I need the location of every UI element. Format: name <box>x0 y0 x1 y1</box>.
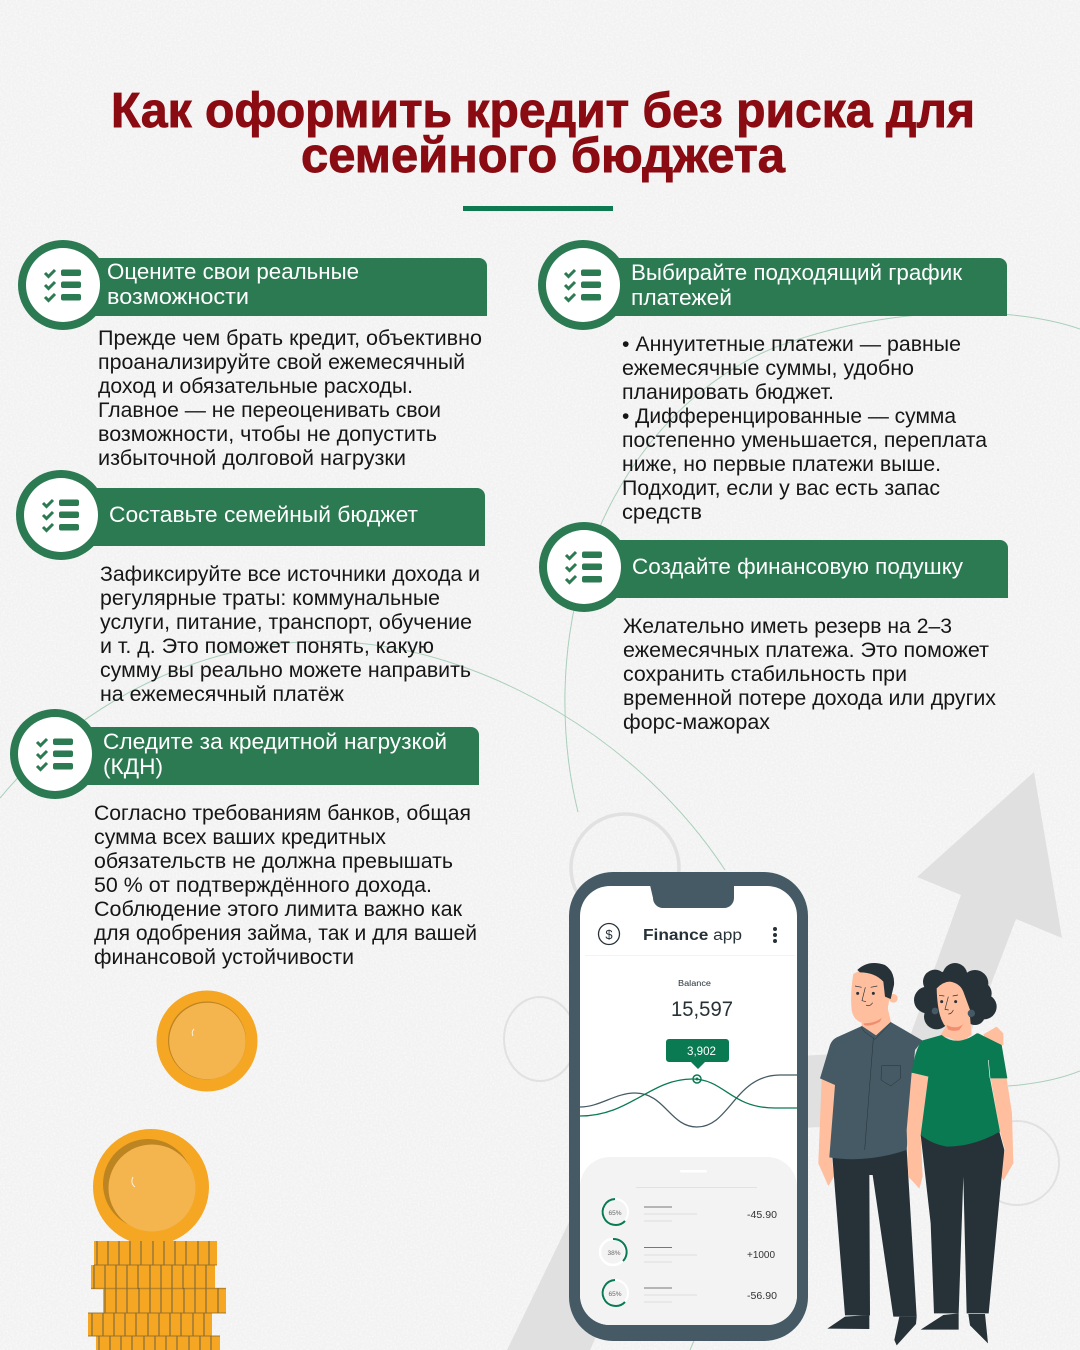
illustration: couple <box>818 963 1013 1345</box>
body text <box>623 614 996 734</box>
icon: checklist <box>10 709 100 799</box>
background circles <box>504 814 1059 1205</box>
body text: сохранить стабильность при <box>623 662 907 686</box>
body text: на ежемесячный платёж <box>100 682 345 706</box>
heading: платежей <box>631 285 732 310</box>
icon: coin stack <box>88 1129 226 1350</box>
man <box>818 963 923 1345</box>
body text: 50 % от подтверждённого дохода. <box>94 873 432 897</box>
heading: (КДН) <box>103 754 163 779</box>
body text: для одобрения займа, так и для вашей <box>94 921 477 945</box>
app header: Finance app <box>643 927 742 944</box>
heading bar <box>88 488 485 546</box>
balance: Balance <box>678 979 712 988</box>
body text: обязательств не должна превышать <box>94 849 453 873</box>
stacked coins <box>88 1241 226 1350</box>
icon: single coin <box>156 990 258 1092</box>
body text: услуги, питание, транспорт, обучение <box>100 610 472 634</box>
screen <box>580 886 797 1325</box>
body text: временной потере дохода или других <box>623 686 996 710</box>
body text: ниже, но первые платежи выше. <box>622 452 941 476</box>
title divider <box>463 206 613 211</box>
transaction row 3: 65% <box>608 1291 622 1298</box>
background thin arcs <box>0 313 1080 1350</box>
transaction row 1 <box>602 1199 777 1225</box>
icon: checklist <box>18 240 108 330</box>
icon: dollar: $ <box>605 927 613 942</box>
body text: ежемесячные суммы, удобно <box>622 356 914 380</box>
body text: форс-мажорах <box>623 710 770 734</box>
transaction row 1: -45.90 <box>747 1210 777 1221</box>
body text <box>622 332 987 524</box>
title: Как оформить кредит без риска для <box>111 84 975 138</box>
body text: Соблюдение этого лимита важно как <box>94 897 463 921</box>
heading <box>107 259 359 309</box>
icon: checklist <box>539 522 629 612</box>
title: семейного бюджета <box>301 129 786 183</box>
transaction row 2: 38% <box>607 1250 621 1257</box>
body text <box>100 562 480 706</box>
balance: 15,597 <box>671 997 733 1021</box>
body text: финансовой устойчивости <box>94 945 354 969</box>
body text: Согласно требованиям банков, общая <box>94 801 471 825</box>
body text: возможности, чтобы не допустить <box>98 422 437 446</box>
heading: Составьте семейный бюджет <box>109 502 418 527</box>
heading <box>103 729 447 779</box>
body text: сумма всех ваших кредитных <box>94 825 386 849</box>
title <box>111 84 975 183</box>
phone body <box>569 872 808 1341</box>
body text <box>98 326 482 470</box>
background growth arrow <box>507 772 1062 1350</box>
body text: сумму вы реально можете направить <box>100 658 471 682</box>
heading bar <box>611 540 1008 598</box>
icon: checklist <box>538 240 628 330</box>
transaction row 2: +1000 <box>747 1250 775 1261</box>
transaction row 1: 65% <box>608 1210 622 1217</box>
icon: dollar <box>598 924 620 944</box>
transaction row 3: -56.90 <box>747 1291 777 1302</box>
panel: assess your means <box>18 240 487 470</box>
heading: Создайте финансовую подушку <box>632 554 964 579</box>
heading bar <box>82 727 479 785</box>
body text: Желательно иметь резерв на 2–3 <box>623 614 952 638</box>
heading: Выбирайте подходящий график <box>631 260 962 285</box>
phone mockup <box>569 872 808 1341</box>
body text: • Аннуитетные платежи — равные <box>622 332 961 356</box>
body text: доход и обязательные расходы. <box>98 374 413 398</box>
large coin <box>93 1129 209 1245</box>
body text: постепенно уменьшается, переплата <box>622 428 987 452</box>
transaction row 2 <box>600 1239 775 1265</box>
body text: избыточной долговой нагрузки <box>98 446 406 470</box>
panel: financial cushion <box>539 522 1008 734</box>
balance <box>671 979 733 1021</box>
body text: Главное — не переоценивать свои <box>98 398 441 422</box>
app header <box>585 924 795 956</box>
icon: checklist <box>16 470 106 560</box>
heading <box>631 260 962 310</box>
heading: возможности <box>107 284 249 309</box>
transaction row 3 <box>602 1280 777 1306</box>
notch <box>650 885 734 908</box>
heading bar <box>90 258 487 316</box>
body text: • Дифференцированные — сумма <box>622 404 956 428</box>
heading bar <box>610 258 1007 316</box>
body text: ежемесячных платежа. Это поможет <box>623 638 989 662</box>
panel: payment schedule <box>538 240 1007 524</box>
panel: debt load <box>10 709 479 969</box>
body text: проанализируйте свой ежемесячный <box>98 350 465 374</box>
transactions sheet <box>580 1157 797 1325</box>
body text: регулярные траты: коммунальные <box>100 586 440 610</box>
body text <box>94 801 477 969</box>
heading: Следите за кредитной нагрузкой <box>103 729 447 754</box>
panel: family budget <box>16 470 485 706</box>
body text: и т. д. Это поможет понять, какую <box>100 634 434 658</box>
icon: menu dots <box>773 927 777 943</box>
woman <box>907 963 1013 1343</box>
body text: планировать бюджет. <box>622 380 834 404</box>
body text: средств <box>622 500 702 524</box>
tooltip: 3,902 <box>687 1046 716 1058</box>
line chart <box>580 1075 797 1127</box>
body text: Прежде чем брать кредит, объективно <box>98 326 482 350</box>
heading: Оцените свои реальные <box>107 259 359 284</box>
tooltip <box>666 1039 729 1069</box>
body text: Подходит, если у вас есть запас <box>622 476 940 500</box>
body text: Зафиксируйте все источники дохода и <box>100 562 480 586</box>
